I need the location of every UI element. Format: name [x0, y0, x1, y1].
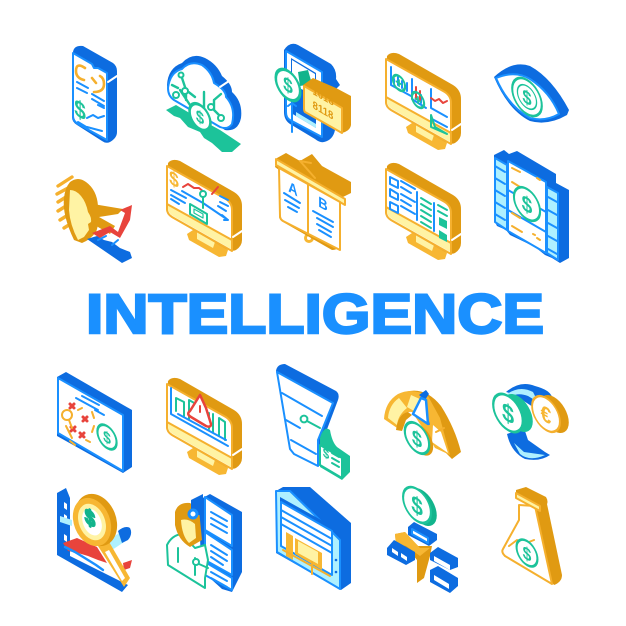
document folder: $ [323, 444, 330, 463]
icon: mobile phone report [72, 46, 117, 143]
data card: 1018 [312, 85, 334, 109]
icon: pallet with dollar: $ [522, 189, 532, 220]
icon: phone with data exchange [276, 44, 351, 142]
icon: flask with dollar: $ [523, 542, 531, 566]
icon: analyst with documents [167, 494, 242, 592]
icon: sales funnel with document [276, 364, 350, 480]
icon: gauge with dollar coin [384, 390, 461, 461]
icon: A/B presentation board: A [288, 178, 298, 201]
icon: A/B presentation board: B [318, 193, 328, 216]
icon: eye with dollar [494, 64, 569, 123]
icon: pallet with dollar [494, 150, 569, 263]
icon: eye with dollar: $ [522, 85, 532, 112]
icon: map with dollar target [57, 372, 132, 473]
icon: monitor with dollar trend [166, 160, 242, 257]
icon: currency exchange [493, 384, 569, 460]
icon: money flow hierarchy [387, 481, 458, 593]
icon: monitor with dollar trend: $ [169, 166, 179, 194]
icon: monitor with lists [385, 163, 461, 260]
icon: map with dollar target: $ [103, 427, 111, 449]
icon: head with profit chart [57, 177, 132, 263]
icon: A/B presentation board [275, 153, 351, 250]
coin: $ [283, 72, 293, 100]
magnifier: $ [85, 504, 95, 533]
icon: cloud with circuit and dollar [166, 56, 241, 152]
data card: 8118 [313, 99, 333, 123]
icon: flask with dollar [502, 487, 562, 585]
dollar sign: $ [74, 94, 86, 128]
icon: monitor with alert chart [166, 378, 242, 475]
icon: chart with magnifier [57, 487, 132, 592]
coin: $ [196, 106, 205, 130]
icon: gauge with dollar coin: $ [412, 425, 422, 454]
icon: money flow hierarchy: $ [411, 490, 423, 524]
data card [303, 78, 351, 133]
title: INTELLIGENCE [86, 282, 544, 345]
icon: warehouse [276, 487, 351, 590]
icon: currency exchange: € [541, 399, 551, 430]
icon: monitor with dashboard charts [385, 53, 461, 150]
icon: currency exchange: $ [502, 397, 514, 432]
